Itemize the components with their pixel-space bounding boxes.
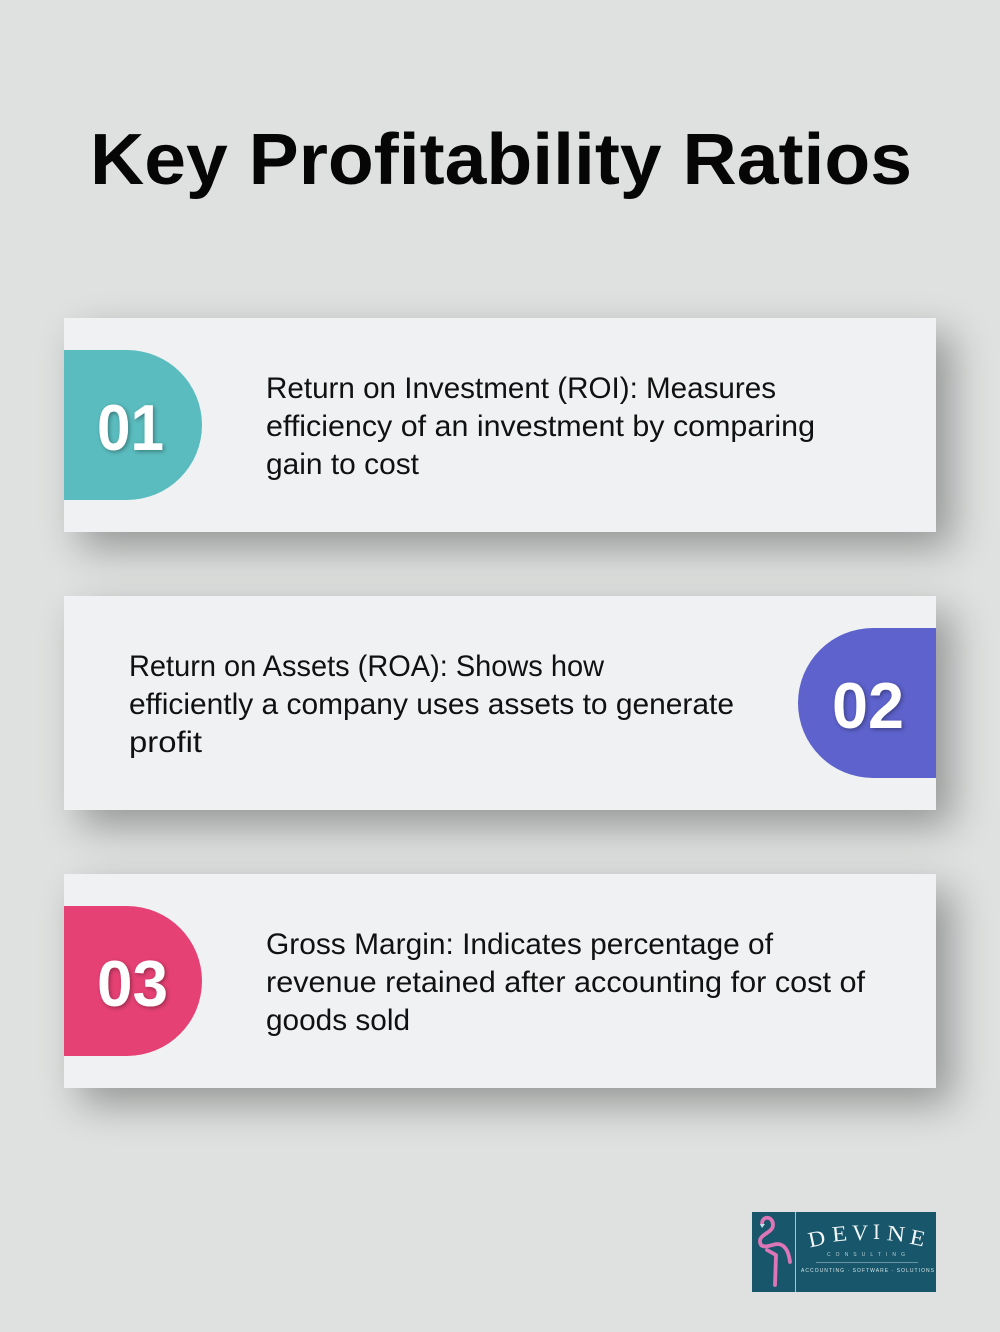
logo wordmark: ACCOUNTING · SOFTWARE · SOLUTIONS	[801, 1268, 935, 1274]
text: ROA description: efficiently a company uses assets to generate	[129, 688, 734, 721]
text: ROA description: Return on Assets (ROA): Shows how	[129, 650, 604, 683]
panel: ROI	[64, 318, 952, 548]
badge: 02	[798, 628, 936, 778]
logo wordmark	[801, 1219, 935, 1274]
text: ROI description	[266, 372, 815, 481]
number: 03: 03	[97, 947, 168, 1020]
text: ROI description: Return on Investment (ROI): Measures	[266, 372, 776, 405]
text: Gross Margin description: goods sold	[266, 1004, 410, 1037]
text: Gross Margin description: Gross Margin: Indicates percentage of	[266, 928, 774, 961]
panel: ROA	[64, 596, 952, 826]
icon: flamingo	[760, 1218, 790, 1285]
text: Gross Margin description: revenue retained after accounting for cost of	[266, 966, 866, 999]
title: Key Profitability Ratios	[90, 120, 912, 200]
logo wordmark: D	[806, 1224, 828, 1252]
panel: Gross Margin	[64, 874, 952, 1104]
badge: 03	[64, 906, 202, 1056]
logo wordmark: I	[873, 1219, 880, 1244]
number: 02: 02	[832, 669, 904, 742]
text: ROI description: efficiency of an investment by comparing	[266, 410, 815, 443]
text: ROA description: profit	[129, 726, 203, 759]
logo wordmark: E	[831, 1220, 848, 1247]
logo: Devine Consulting	[752, 1212, 936, 1292]
logo wordmark: V	[852, 1220, 868, 1245]
logo wordmark: CONSULTING	[827, 1252, 905, 1258]
number: 01: 01	[97, 391, 164, 464]
logo wordmark: N	[886, 1220, 906, 1247]
text: Gross Margin description	[266, 928, 866, 1037]
text: ROA description	[129, 650, 734, 759]
text: ROI description: gain to cost	[266, 448, 420, 481]
logo wordmark: E	[908, 1224, 928, 1251]
badge: 01	[64, 350, 202, 500]
